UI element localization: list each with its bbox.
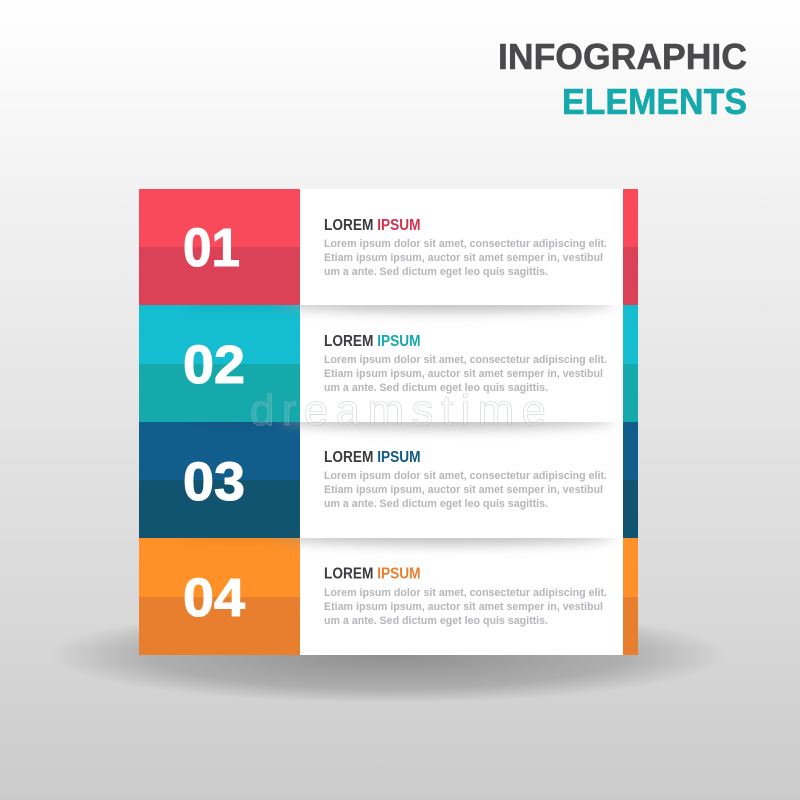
title line: elements: ELEMENTS (562, 81, 747, 122)
number 04: 04 (183, 568, 245, 628)
panel: row 02 (139, 294, 638, 422)
white text card (300, 422, 623, 538)
heading: LOREM IPSUM (324, 217, 420, 234)
red number block (139, 189, 300, 305)
white text card (300, 305, 623, 422)
red right strip (623, 189, 638, 305)
card shadow (202, 538, 614, 552)
body text (324, 587, 607, 627)
number 01: 01 (183, 218, 240, 278)
card shadow (276, 422, 614, 436)
body text: Etiam ipsum ipsum, auctor sit amet semper in, vestibul (324, 368, 603, 380)
body text: um a ante. Sed dictum eget leo quis sagittis. (324, 266, 548, 278)
body text: Lorem ipsum dolor sit amet, consectetur adipiscing elit. (324, 354, 607, 366)
teal right strip (623, 305, 638, 422)
title line: infographic: INFOGRAPHIC (498, 36, 747, 77)
watermark: dreamstime (250, 386, 546, 435)
body text: Etiam ipsum ipsum, auctor sit amet semper in, vestibul (324, 484, 603, 496)
body text: Etiam ipsum ipsum, auctor sit amet semper in, vestibul (324, 601, 603, 613)
blue right strip (623, 422, 638, 538)
body text (324, 238, 607, 278)
heading: LOREM IPSUM (324, 333, 420, 350)
heading: LOREM IPSUM (324, 449, 420, 466)
number 02: 02 (183, 335, 245, 395)
body text: um a ante. Sed dictum eget leo quis sagittis. (324, 382, 548, 394)
blue number block (139, 422, 300, 538)
white text card (300, 189, 623, 305)
orange right strip (623, 538, 638, 655)
body text (324, 354, 607, 394)
body text: um a ante. Sed dictum eget leo quis sagittis. (324, 615, 548, 627)
body text: Lorem ipsum dolor sit amet, consectetur adipiscing elit. (324, 587, 607, 599)
teal number block (139, 305, 300, 422)
heading: LOREM IPSUM (324, 566, 420, 582)
body text: Lorem ipsum dolor sit amet, consectetur adipiscing elit. (324, 470, 607, 482)
floor shadow (50, 607, 726, 703)
orange number block (139, 538, 300, 655)
body text: Lorem ipsum dolor sit amet, consectetur adipiscing elit. (324, 238, 607, 250)
number 03: 03 (183, 452, 245, 512)
card shadow (204, 305, 614, 318)
white text card (300, 538, 623, 655)
panel: row 01 (139, 189, 638, 305)
body text: Etiam ipsum ipsum, auctor sit amet semper in, vestibul (324, 252, 603, 264)
title (498, 36, 747, 122)
body text: um a ante. Sed dictum eget leo quis sagittis. (324, 498, 548, 510)
panel: row 04 (139, 527, 638, 655)
body text (324, 470, 607, 510)
panel: row 03 (139, 411, 638, 538)
